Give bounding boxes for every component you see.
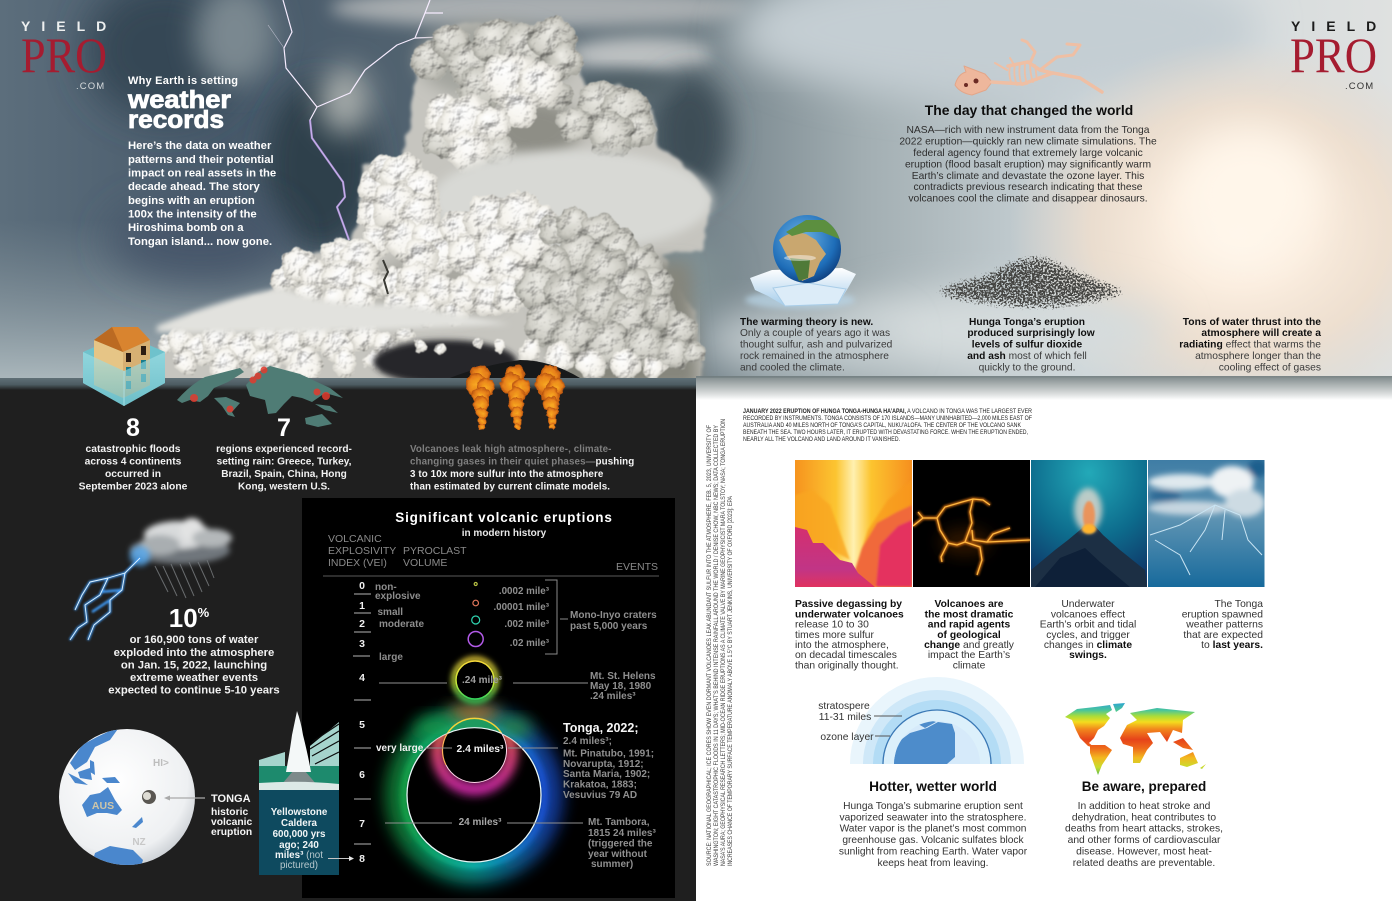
text: sources (vertical): NASA’S AURA; GEOPHYSICAL RESEARCH LETTERS; MID-OCEAN RIDGE ERUPTIONS AS A CLIMATE VALVE BY MARINE GEOPHYSICIST MARA TOLSTOY; NASA; TONGA ERUPTION [720, 419, 727, 866]
stat: 8 floods: 8 [126, 414, 140, 442]
label: Tonga: TONGA [211, 793, 251, 805]
Yellowstone text: Yellowstone [271, 807, 328, 818]
stat: 7 regions: 7 [277, 414, 291, 442]
map: global heat [1065, 703, 1206, 775]
arrow to scale 8 [328, 856, 354, 861]
caption: volcanoes are: and rapid agents [928, 620, 1010, 630]
panel: volcanic eruptions chart: in modern history [462, 528, 547, 539]
stat: 7 regions: regions experienced record- [216, 444, 352, 455]
globe: Tonga location [59, 726, 205, 870]
eruption circle: Mt St Helens [456, 661, 494, 699]
Yellowstone text [271, 807, 328, 871]
Yellowstone text: pictured) [280, 860, 318, 871]
panel: volcanic eruptions chart [302, 498, 675, 898]
text: Hunga Tonga's submarine eruption: vaporized seawater into the stratosphere. [840, 812, 1026, 824]
VEI scale: 5 [359, 719, 365, 731]
lightning bolts [268, 0, 443, 240]
event: Tonga 2022: Santa Maria, 1902; [563, 769, 650, 780]
event: Tonga 2022 [563, 721, 654, 801]
intro text: 100x the intensity of the [128, 208, 257, 220]
caption: underwater volcanoes: changes in climate [1044, 640, 1132, 651]
right horizon fade [696, 376, 1392, 400]
text: Hunga Tonga's submarine eruption: keeps heat from leaving. [878, 858, 988, 869]
VEI scale: 8 [359, 853, 365, 865]
text: Hunga Tonga's submarine eruption: greenhouse gas. Volcanic sulfates block [842, 835, 1025, 846]
VEI labels: moderate [379, 619, 424, 630]
text: warming theory: rock remained in the atmosphere [740, 351, 889, 362]
text: warming theory [740, 317, 893, 374]
text: Hunga Tonga's eruption: quickly to the ground. [979, 362, 1075, 374]
text: heat stroke: In addition to heat stroke and [1078, 801, 1211, 812]
text: NASA paragraph: contradicts previous research indicating that these [914, 182, 1143, 193]
Yellowstone text: miles³ (not [275, 850, 323, 861]
intro text: Here’s the data on weather [128, 140, 272, 152]
panel: sky photo with eruption [0, 0, 1392, 420]
panel: volcanic eruptions chart: 2.4 miles³ [457, 744, 504, 755]
VEI labels: small [378, 607, 403, 618]
icon: ash pile [928, 257, 1132, 308]
image: underwater volcano [1031, 460, 1147, 587]
VEI labels: explosive [375, 591, 421, 602]
intro text: Hiroshima bomb on a [128, 222, 244, 234]
lower left dark panel [0, 378, 696, 901]
text: January 2022 eruption intro: JANUARY 2022 ERUPTION OF HUNGA TONGA-HUNGA HA’APAI, A VOLCANO IN TONGA WAS THE LARGEST EVER [743, 408, 1032, 415]
VEI labels: large [379, 652, 403, 663]
text: Hunga Tonga's submarine eruption: sunlight from reaching Earth. Water vapor [839, 846, 1028, 858]
VEI scale: 7 [359, 818, 365, 830]
text: volcanoes leak [410, 444, 634, 492]
event: St Helens [590, 671, 656, 702]
event: Tambora: 1815 24 miles³ [588, 828, 656, 839]
stat: 7 regions: Brazil, Spain, China, Hong [221, 469, 347, 480]
volume labels: .002 mile³ [504, 619, 550, 630]
caption: passive degassing [795, 599, 904, 672]
logo left: PRO [21, 27, 107, 83]
volume labels: .00001 mile³ [493, 602, 550, 613]
event: Tonga 2022: Tonga, 2022; [563, 721, 638, 735]
VEI labels: very large [376, 743, 424, 754]
text: January 2022 eruption intro: BENEATH THE SEA. TWO HOURS LATER, IT ERUPTED WITH DEVASTATING FORCE. WHEN THE ERUPTION ENDED, [743, 429, 1028, 436]
stat: 8 floods: September 2023 alone [79, 482, 188, 492]
text: Hunga Tonga's eruption: levels of sulfur dioxide [972, 340, 1083, 350]
column headers: EXPLOSIVITY [328, 545, 396, 557]
icon: dinosaur skeleton [955, 40, 1102, 95]
Yellowstone text: ago; 240 [279, 840, 319, 851]
text: warming theory: and cooled the climate. [740, 362, 845, 374]
caption: underwater volcanoes: volcanoes effect [1051, 610, 1125, 620]
caption: volcanoes are: climate [953, 660, 986, 672]
caption: volcanoes are: of geological [937, 630, 1001, 641]
text: sources (vertical): WASHINGTON; EIGHT CATASTROPHIC FLOODS IN 11 DAYS; WHAT’S BEHIND INTENSE RAINFALL AROUND THE WORLD / DENISE CHOW, NBC NEWS; DATA COLLECTED BY [713, 425, 720, 866]
VEI scale [359, 580, 365, 865]
text: January 2022 eruption intro: AUSTRALIA AND 40 MILES NORTH OF TONGA’S CAPITAL, NUKU’ALOFA. THE CENTER OF THE VOLCANO SANK [743, 422, 1021, 429]
text: tons of water [1179, 317, 1321, 374]
label: Tonga: eruption [211, 827, 252, 838]
event: St Helens: .24 miles³ [590, 691, 636, 702]
panel: Yellowstone caldera [259, 711, 354, 875]
event: Mono-Inyo: Mono-Inyo craters [570, 610, 657, 621]
text: volcanoes leak: changing gases in their quiet phases—pushing [410, 456, 634, 468]
column headers [328, 533, 658, 573]
logo right: YIELD [1291, 18, 1387, 34]
map: record-setting rain regions [177, 366, 343, 427]
icon: storm cloud with lightning [70, 518, 232, 640]
caption: passive degassing: into the atmosphere, [795, 640, 889, 651]
text: sources (vertical): SOURCE: NATIONAL GEOGRAPHICAL; ICE CORES SHOW EVEN DORMANT VOLCANOES LEAK ABUNDANT SULFUR INTO THE ATMOSPHERE, FEB. 5, 2023, UNIVERSITY OF [706, 425, 713, 866]
column headers: EVENTS [616, 561, 658, 573]
label: Tonga [211, 793, 252, 838]
text: volcanoes leak: than estimated by current climate models. [410, 482, 610, 492]
stat: 8 floods: across 4 continents [85, 456, 182, 468]
text: sources (vertical): INCREASES CHANCE OF TEMPORARY SURFACE TEMPERATURE ANOMALY ABOVE 1.5°C BY STUART JENKINS, UNIVERSITY OF OXFORD [2023]; EPA [726, 496, 734, 866]
VEI scale: 6 [359, 769, 365, 781]
text: warming theory: The warming theory is new. [740, 317, 873, 328]
icon: earth on ice [745, 215, 856, 309]
horizon band [0, 378, 696, 390]
caption: Tonga eruption [1182, 599, 1263, 651]
intro text: begins with an eruption [128, 195, 255, 207]
logo right: PRO [1290, 27, 1377, 83]
VEI scale: 3 [359, 638, 365, 650]
atmosphere labels: 11-31 miles [819, 712, 871, 723]
stat: 10 percent: expected to continue 5-10 years [108, 684, 280, 696]
text: NASA paragraph: 2022 eruption—quickly ran new climate simulations. The [899, 136, 1157, 148]
title block: Why Earth is setting [128, 75, 238, 87]
text: heat stroke: disease. However, most heat- [1076, 846, 1212, 858]
caption: volcanoes are [924, 599, 1015, 672]
column headers: INDEX (VEI) [328, 557, 387, 569]
ring glow: large circle [398, 659, 550, 871]
stat: 10 percent: on Jan. 15, 2022, launching [121, 660, 267, 672]
Yellowstone illustration [259, 711, 339, 790]
text: Hunga Tonga's submarine eruption: Water vapor is the planet’s most common [840, 824, 1026, 834]
Yellowstone text: Caldera [281, 818, 318, 829]
stat: 10 percent: or 160,900 tons of water [130, 634, 259, 646]
column headers: VOLUME [403, 557, 447, 569]
event: Tambora: Mt. Tambora, [588, 817, 650, 828]
lower right white panel [696, 395, 1392, 901]
low fog band [157, 288, 510, 332]
plume silhouette [157, 20, 712, 385]
logo right: .COM [1345, 81, 1374, 92]
event: Tonga 2022: Krakatoa, 1883; [563, 780, 637, 790]
text: NASA paragraph: NASA—rich with new instrument data from the Tonga [906, 125, 1150, 136]
Tonga ash mark [142, 790, 156, 804]
icon: three fire plumes [465, 365, 565, 430]
event: St Helens: May 18, 1980 [590, 681, 652, 692]
stat: 8 floods: occurred in [105, 469, 161, 480]
island silhouette [373, 260, 580, 384]
text: NASA paragraph: volcanoes cool the climate and disappear dinosaurs. [908, 194, 1148, 204]
logo left: YIELD [21, 18, 117, 34]
volume labels: .02 mile³ [510, 638, 550, 649]
stat: 10 percent: exploded into the atmosphere [114, 647, 274, 659]
image: lava cracks [913, 460, 1030, 587]
text: volcanoes leak: Volcanoes leak high atmosphere-, climate- [410, 444, 612, 455]
leader lines [379, 683, 588, 823]
text: warming theory: Only a couple of years ago it was [740, 328, 890, 339]
caption: passive degassing: underwater volcanoes [795, 610, 904, 620]
VEI scale: 0 [359, 580, 365, 592]
caption: underwater volcanoes: cycles, and trigger [1046, 630, 1130, 641]
intro text [128, 140, 276, 248]
event: Tambora [588, 817, 656, 870]
text: heat stroke: dehydration, heat contributes to [1072, 812, 1216, 824]
atmosphere labels [818, 701, 874, 743]
text: tons of water: Tons of water thrust into the [1183, 317, 1321, 328]
caption: volcanoes are: the most dramatic [925, 610, 1014, 620]
heading: the day that changed the world: The day that changed the world [925, 102, 1133, 118]
title block: records [128, 106, 224, 134]
caption: volcanoes are: impact the Earth’s [928, 650, 1010, 661]
caption: Tonga eruption: weather patterns [1185, 620, 1263, 630]
globe: Tonga location: HI> [153, 758, 169, 769]
event: Tonga 2022: 2.4 miles³; [563, 736, 612, 747]
event: Mono-Inyo: past 5,000 years [570, 621, 648, 632]
smooth fog band upper [432, 150, 712, 250]
event: Tambora: summer) [591, 859, 633, 870]
stat: 8 floods: catastrophic floods [86, 444, 181, 455]
text: heat stroke: and other forms of cardiovascular [1068, 835, 1221, 846]
panel: volcanic eruptions chart: 24 miles³ [459, 817, 502, 828]
intro text: Tongan island... now gone. [128, 236, 272, 248]
VEI labels [375, 582, 424, 754]
event: Tonga 2022: Mt. Pinatubo, 1991; [563, 748, 654, 760]
column headers: VOLCANIC [328, 533, 382, 545]
atmosphere labels: ozone layer [820, 732, 874, 743]
arrow to Tonga [164, 796, 205, 800]
VEI scale: 1 [359, 600, 365, 612]
caption: underwater volcanoes: swings. [1069, 650, 1107, 661]
VEI scale: 2 [359, 618, 365, 630]
caption: underwater volcanoes [1040, 599, 1136, 661]
atmosphere labels: stratospere [818, 701, 870, 712]
caption: passive degassing: Passive degassing by [795, 599, 902, 610]
text: NASA paragraph: Earth’s climate and devastate the ozone layer. This [912, 171, 1144, 182]
chart title: Significant volcanic eruptions [395, 510, 613, 525]
column headers: PYROCLAST [403, 545, 467, 557]
event: Tambora: (triggered the [588, 838, 653, 850]
eruption circle: Tonga 2.4 miles [438, 715, 512, 789]
small eruption circles [468, 582, 483, 646]
icon: flooded building [83, 327, 165, 406]
smoke plume [156, 17, 712, 390]
caption: volcanoes are: Volcanoes are [934, 599, 1004, 610]
text: Hunga Tonga's eruption: Hunga Tonga’s eruption [969, 317, 1085, 328]
event: Tonga 2022: Novarupta, 1912; [563, 759, 644, 770]
event: Tambora: year without [588, 849, 648, 860]
text: warming theory: thought sulfur, ash and pulvarized [740, 340, 893, 350]
globe: Tonga location: AUS [92, 800, 114, 812]
text: heat stroke [1065, 801, 1223, 869]
image: degassing [795, 460, 912, 587]
caption: Tonga eruption: The Tonga [1215, 599, 1263, 610]
caption: passive degassing: than originally thought. [795, 660, 899, 672]
text: Hunga Tonga's submarine eruption [839, 801, 1028, 869]
heading: Hotter, wetter world: Hotter, wetter world [869, 779, 997, 794]
stat: 10 percent: % [198, 605, 210, 620]
text: January 2022 eruption intro: NEARLY ALL THE VOLCANO AND LAND AROUND IT VANISHED. [743, 436, 900, 443]
text: tons of water: atmosphere longer than the [1195, 351, 1321, 362]
caption: passive degassing: times more sulfur [795, 630, 875, 641]
event: Mono-Inyo [570, 610, 657, 632]
label: Tonga: volcanic [211, 817, 252, 828]
text: NASA paragraph: federal agency found that extremely large volcanic [913, 148, 1143, 159]
text: NASA paragraph: eruption (flood basalt eruption) may significantly warm [905, 160, 1151, 170]
volume labels: .0002 mile³ [499, 586, 550, 597]
stat: 10 percent: extreme weather events [130, 672, 258, 684]
VEI labels: non- [375, 582, 397, 593]
caption: passive degassing: release 10 to 30 [795, 620, 869, 630]
text: NASA paragraph [899, 125, 1157, 204]
event: Tonga 2022: Vesuvius 79 AD [563, 790, 637, 801]
title block: weather [127, 86, 231, 114]
eruption circle: 24 miles [407, 728, 541, 862]
stat: 7 regions: Kong, western U.S. [238, 482, 330, 492]
stat: 10 percent [108, 603, 280, 696]
label: Tonga: historic [211, 807, 248, 818]
text: January 2022 eruption intro: RECORDED BY INSTRUMENTS. TONGA CONSISTS OF 170 ISLANDS—MANY UNINHABITED—2,000 MILES EAST OF [743, 415, 1032, 422]
stat: 7 regions [216, 414, 352, 492]
Yellowstone text: 600,000 yrs [273, 829, 326, 840]
text: Hunga Tonga's submarine eruption: Hunga Tonga’s submarine eruption sent [843, 801, 1023, 812]
circle values: .24 mile³ [462, 675, 503, 686]
title block [127, 75, 276, 248]
volume labels [493, 586, 550, 649]
caption: Tonga eruption: to last years. [1201, 640, 1263, 651]
intro text: decade ahead. The story [128, 181, 261, 193]
text: Hunga Tonga's eruption [967, 317, 1095, 374]
event: St Helens: Mt. St. Helens [590, 671, 656, 682]
intro text: impact on real assets in the [128, 168, 276, 180]
VEI scale: 4 [359, 672, 365, 684]
stat: 8 floods [79, 414, 188, 492]
caption: underwater volcanoes: Earth’s orbit and tidal [1040, 620, 1136, 630]
caption: volcanoes are: change and greatly [924, 640, 1015, 651]
caption: Tonga eruption: that are expected [1183, 630, 1263, 641]
text: sources (vertical) [706, 419, 734, 866]
image: storm [1148, 459, 1268, 587]
logo left: .COM [76, 81, 105, 92]
text: tons of water: atmosphere will create a [1201, 328, 1321, 339]
text: January 2022 eruption intro [743, 408, 1032, 443]
text: tons of water: cooling effect of gases [1219, 362, 1321, 374]
caption: passive degassing: on decadal timescales [795, 650, 897, 661]
text: tons of water: radiating effect that warms the [1179, 340, 1321, 350]
diagram: atmosphere layers [818, 677, 1024, 764]
stat: 7 regions: setting rain: Greece, Turkey, [217, 456, 352, 468]
intro text: patterns and their potential [128, 154, 274, 166]
caption: Tonga eruption: eruption spawned [1182, 610, 1263, 620]
text: volcanoes leak: 3 to 10x more sulfur into the atmosphere [410, 469, 604, 480]
text: Hunga Tonga's eruption: and ash most of which fell [967, 351, 1087, 362]
text: heat stroke: deaths from heart attacks, strokes, [1065, 824, 1223, 834]
heading: Be aware, prepared: Be aware, prepared [1082, 779, 1206, 794]
text: heat stroke: related deaths are preventable. [1073, 858, 1215, 869]
caption: underwater volcanoes: Underwater [1061, 599, 1115, 610]
text: Hunga Tonga's eruption: produced surprisingly low [967, 328, 1095, 339]
stat: 10 percent: 10 [169, 603, 198, 633]
globe: Tonga location: NZ [132, 837, 146, 848]
